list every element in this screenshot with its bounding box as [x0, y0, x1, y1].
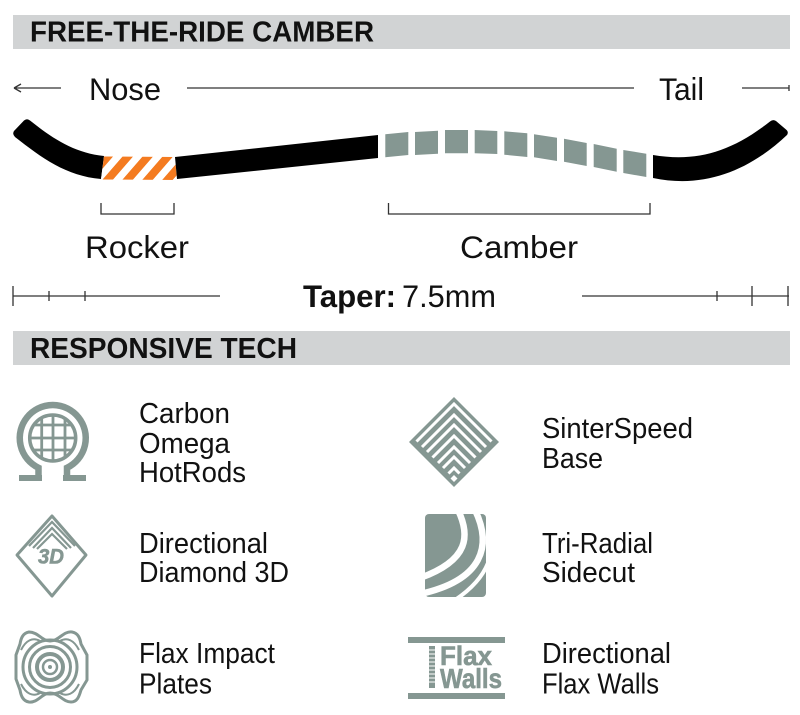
taper value: 7.5mm	[402, 278, 496, 314]
text: directional diamond 3d: Directional	[139, 528, 268, 560]
rocker bracket and label	[85, 203, 189, 265]
nose label with arrow: Nose	[89, 71, 161, 107]
camber segments	[385, 130, 646, 177]
icon: directional diamond 3d: 3D	[38, 546, 64, 568]
heading: responsive tech	[13, 331, 790, 365]
text: carbon omega hotrods: Carbon	[139, 398, 230, 430]
text: tri-radial sidecut: Sidecut	[542, 557, 635, 589]
flat black section	[175, 135, 378, 179]
icon: sinterspeed base	[409, 397, 499, 487]
heading: free-the-ride camber: FREE-THE-RIDE CAMBER	[30, 16, 374, 48]
nose label with arrow	[14, 71, 161, 107]
rocker bracket and label: Rocker	[85, 229, 189, 265]
text: directional flax walls	[542, 638, 671, 700]
text: tri-radial sidecut	[542, 528, 653, 589]
text: flax impact plates	[139, 638, 275, 700]
direction line	[187, 87, 634, 89]
icon: tri-radial sidecut	[420, 510, 492, 604]
text: sinterspeed base	[542, 413, 693, 475]
taper value: Taper:	[303, 278, 396, 314]
icon: carbon omega hotrods	[19, 405, 86, 481]
icon: directional flax walls: Flax	[440, 641, 492, 671]
icon: directional diamond 3d	[17, 516, 86, 596]
rocker section	[101, 156, 177, 180]
nose section	[13, 119, 104, 179]
text: carbon omega hotrods: HotRods	[139, 457, 246, 489]
text: directional diamond 3d	[139, 528, 289, 589]
heading: free-the-ride camber	[13, 15, 790, 49]
tail label with line	[659, 71, 789, 107]
icon: directional flax walls	[408, 637, 505, 699]
text: carbon omega hotrods	[139, 398, 246, 489]
tail label with line: Tail	[659, 71, 704, 107]
camber bracket and label	[388, 203, 650, 265]
text: carbon omega hotrods: Omega	[139, 428, 230, 460]
icon: flax impact plates	[16, 632, 87, 702]
text: sinterspeed base: Base	[542, 443, 603, 475]
tail section	[653, 120, 788, 181]
text: sinterspeed base: SinterSpeed	[542, 413, 693, 445]
text: directional diamond 3d: Diamond 3D	[139, 557, 289, 589]
text: flax impact plates: Plates	[139, 668, 212, 700]
heading: responsive tech: RESPONSIVE TECH	[30, 333, 297, 365]
taper right ruler	[582, 286, 789, 306]
text: tri-radial sidecut: Tri-Radial	[542, 528, 653, 560]
text: flax impact plates: Flax Impact	[139, 638, 275, 670]
camber bracket and label: Camber	[460, 229, 578, 265]
icon: directional flax walls: Walls	[440, 663, 502, 694]
text: directional flax walls: Directional	[542, 638, 671, 670]
taper left ruler	[13, 286, 220, 306]
text: directional flax walls: Flax Walls	[542, 668, 659, 700]
board profile	[13, 119, 788, 181]
